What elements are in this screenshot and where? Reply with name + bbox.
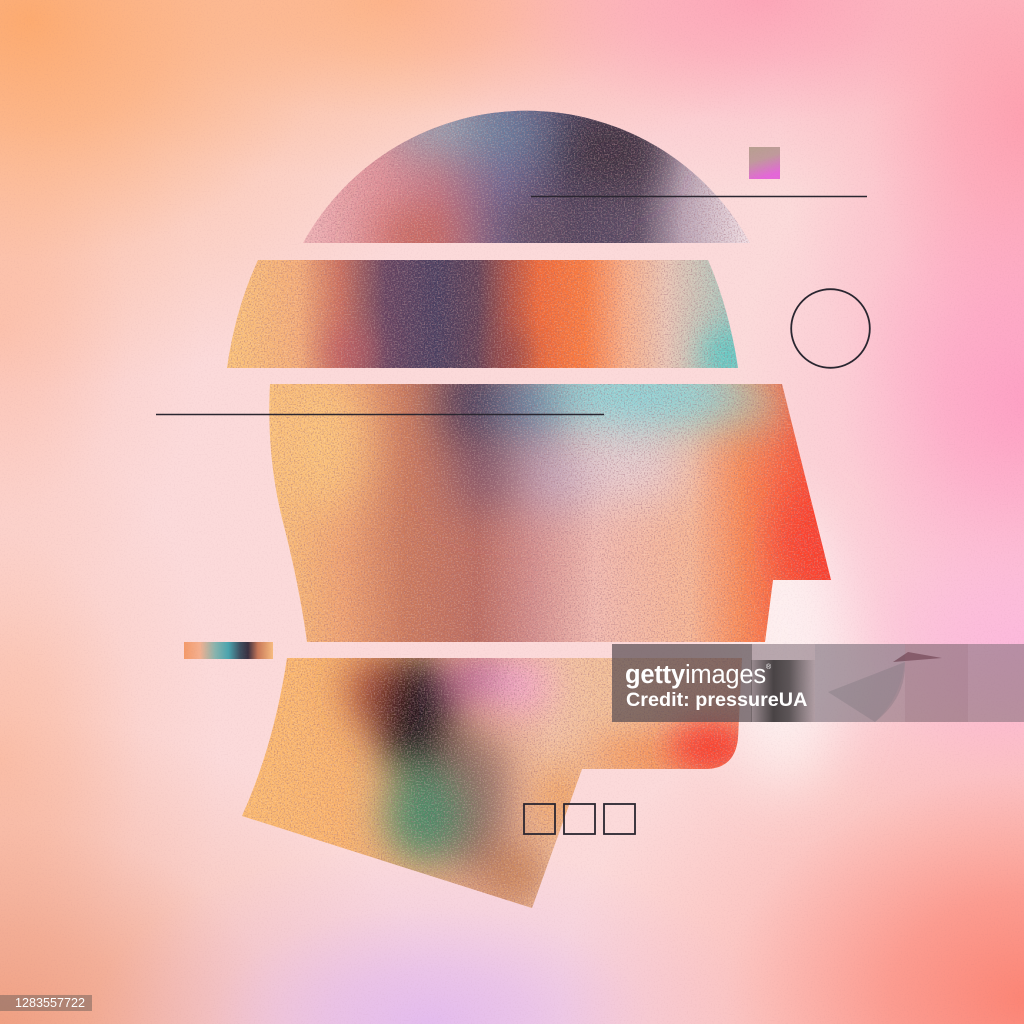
small gradient square bbox=[749, 147, 780, 179]
circle outline bbox=[791, 289, 870, 368]
white glow under chin bbox=[725, 510, 845, 790]
second band slice bbox=[227, 260, 738, 368]
line: upper right bbox=[531, 196, 867, 198]
watermark: credit: Credit: pressureUA bbox=[626, 689, 807, 711]
line: middle left bbox=[156, 414, 604, 416]
top dome slice bbox=[303, 110, 750, 243]
film grain on head shapes bbox=[227, 111, 830, 908]
image id tag: 1283557722 bbox=[15, 996, 85, 1010]
jaw and neck slice bbox=[235, 650, 754, 915]
face slice bbox=[269, 384, 831, 642]
small gradient bar bbox=[184, 642, 273, 659]
watermark: getty images logo text: gettyimages® bbox=[625, 661, 771, 689]
image id tag bbox=[0, 995, 92, 1011]
three outlined squares bbox=[524, 804, 635, 834]
watermark band bbox=[612, 644, 1024, 722]
